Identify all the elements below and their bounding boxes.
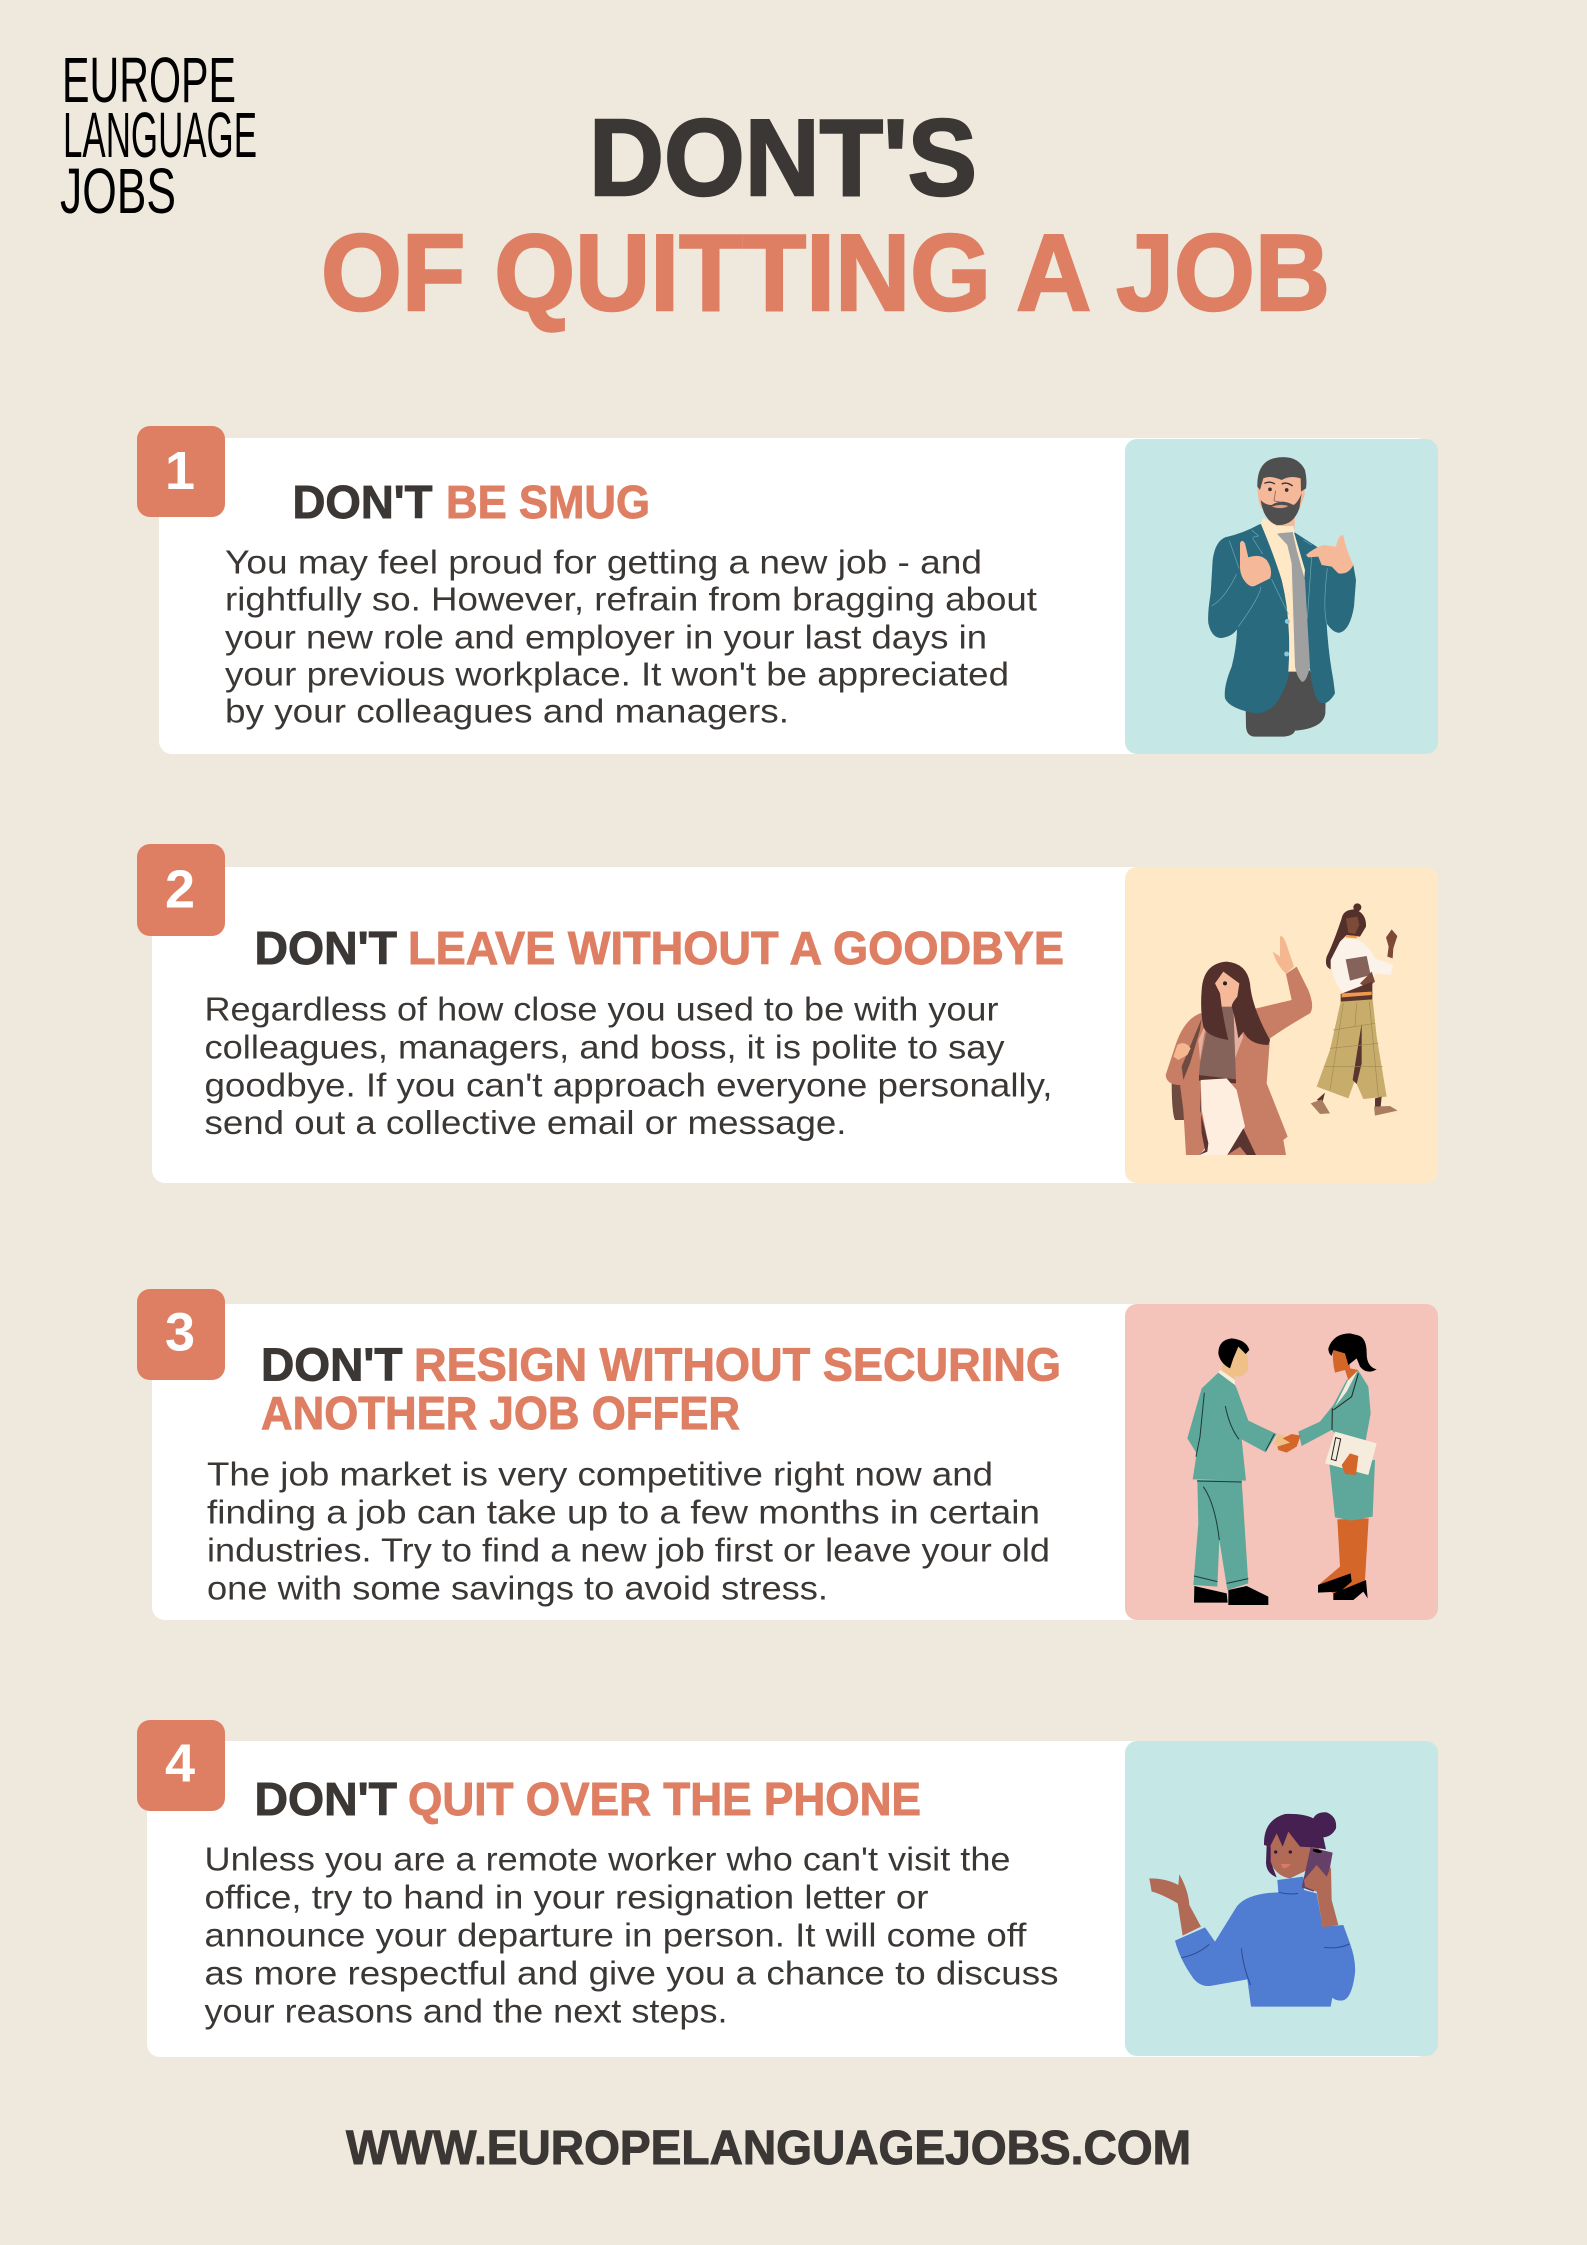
body text 1: your new role and employer in your last days in (225, 619, 987, 656)
body text 2 (204, 991, 1052, 1141)
heading: don't be smug: BE SMUG (446, 476, 650, 528)
number badge 1 (137, 426, 225, 517)
number badge 2 (137, 844, 225, 936)
illustration: woman talking on the phone (1125, 1741, 1438, 2056)
logo: Europe Language Jobs (60, 44, 257, 227)
heading: don't leave without a goodbye: LEAVE WITHOUT A GOODBYE (408, 922, 1064, 974)
heading: don't resign without securing another job offer (261, 1339, 1061, 1439)
title: DONT'S (589, 97, 977, 219)
body text 4: as more respectful and give you a chance to discuss (204, 1955, 1058, 1992)
panel: tip 4 (137, 1720, 1438, 2057)
number badge 3 (137, 1289, 225, 1380)
body text 2: Regardless of how close you used to be with your (204, 991, 999, 1028)
body text 3 (207, 1455, 1050, 1606)
illustration: two women waving goodbye (1125, 867, 1438, 1183)
heading: don't leave without a goodbye: DON'T (254, 922, 397, 974)
number badge 3: 3 (165, 1302, 195, 1362)
panel: tip 2 (137, 844, 1438, 1183)
number badge 2: 2 (165, 860, 195, 920)
heading: don't resign without securing another job offer: DON'T (261, 1339, 402, 1391)
number badge 1: 1 (165, 441, 195, 501)
footer: website URL: WWW.EUROPELANGUAGEJOBS.COM (346, 2122, 1191, 2175)
body text 1 (225, 543, 1037, 730)
body text 2: send out a collective email or message. (204, 1104, 846, 1141)
body text 2: goodbye. If you can't approach everyone personally, (204, 1067, 1052, 1104)
logo: Europe Language Jobs: EUROPE (62, 44, 236, 116)
body text 4: office, try to hand in your resignation letter or (204, 1879, 928, 1916)
title (321, 97, 1330, 334)
title: OF QUITTING A JOB (321, 212, 1330, 334)
body text 1: by your colleagues and managers. (225, 693, 789, 730)
body text 4 (204, 1841, 1058, 2030)
body text 4: your reasons and the next steps. (204, 1993, 728, 2030)
heading: don't resign without securing another job offer: ANOTHER JOB OFFER (261, 1387, 740, 1439)
heading: don't be smug: DON'T (292, 476, 432, 528)
heading: don't quit over the phone: QUIT OVER THE PHONE (408, 1773, 921, 1825)
body text 1: You may feel proud for getting a new job - and (225, 543, 982, 580)
illustration: man pointing at himself (1125, 439, 1438, 754)
logo: Europe Language Jobs: LANGUAGE (63, 99, 257, 171)
heading: don't resign without securing another job offer: RESIGN WITHOUT SECURING (414, 1339, 1061, 1391)
heading: don't be smug (292, 476, 650, 528)
body text 1: your previous workplace. It won't be appreciated (225, 655, 1009, 692)
body text 3: one with some savings to avoid stress. (207, 1569, 828, 1606)
panel: tip 3 (137, 1289, 1438, 1620)
body text 1: rightfully so. However, refrain from bragging about (225, 581, 1037, 618)
body text 4: Unless you are a remote worker who can't visit the (204, 1841, 1010, 1878)
body text 4: announce your departure in person. It will come off (204, 1917, 1027, 1954)
number badge 4: 4 (165, 1734, 195, 1794)
logo: Europe Language Jobs: JOBS (60, 155, 176, 227)
illustration: handshake between two colleagues (1125, 1304, 1438, 1620)
body text 3: finding a job can take up to a few months in certain (207, 1493, 1040, 1530)
number badge 4 (137, 1720, 225, 1811)
panel: tip 1 (137, 426, 1438, 754)
body text 2: colleagues, managers, and boss, it is polite to say (204, 1029, 1005, 1066)
body text 3: The job market is very competitive right now and (207, 1455, 993, 1492)
heading: don't quit over the phone: DON'T (254, 1773, 397, 1825)
body text 3: industries. Try to find a new job first or leave your old (207, 1532, 1050, 1569)
